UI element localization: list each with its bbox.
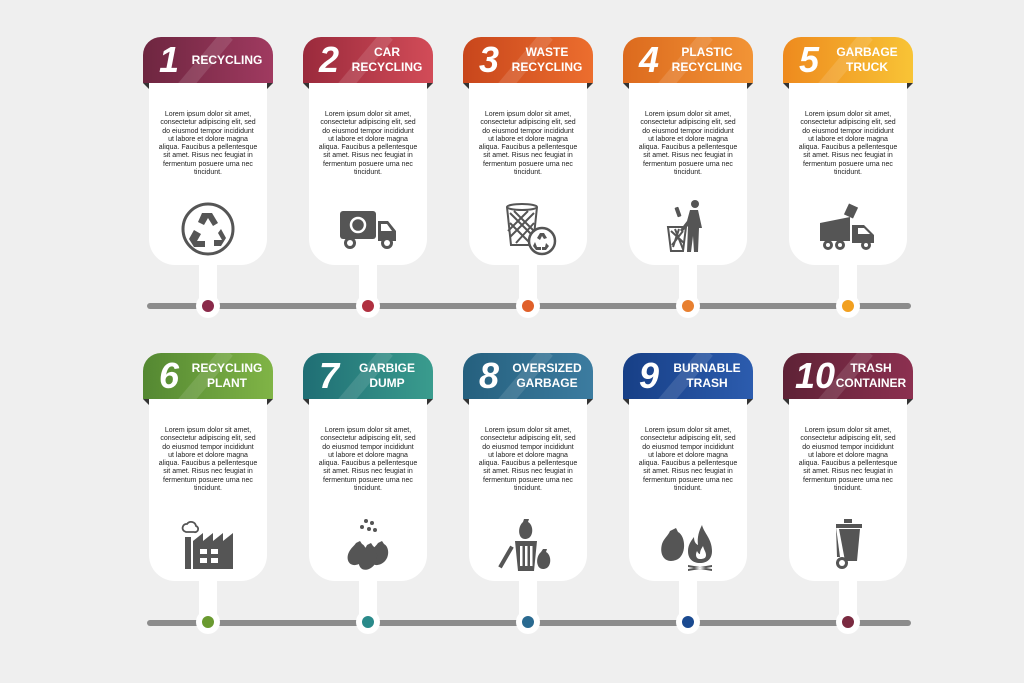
text 3: consectetur adipiscing elit, sed: [480, 119, 576, 126]
text 9: do eiusmod tempor incididunt: [642, 444, 734, 451]
card 1: [143, 37, 273, 318]
text 5: sit amet. Risus nec feugiat in: [803, 152, 893, 159]
text 6: do eiusmod tempor incididunt: [162, 444, 254, 451]
header 8: OVERSIZED: [512, 361, 582, 375]
card 8: [463, 353, 593, 634]
icon: recycle: [182, 202, 234, 256]
icon: person throwing bottle: [666, 200, 702, 252]
text 6: fermentum posuere urna nec: [163, 477, 253, 484]
dot 9: [682, 616, 694, 628]
header 5: 5: [799, 39, 819, 80]
timeline row 2: [147, 620, 911, 626]
text 8: Lorem ipsum dolor sit amet,: [485, 427, 571, 434]
text 3: [479, 110, 577, 176]
text 7: Lorem ipsum dolor sit amet,: [325, 427, 411, 434]
header 7: [303, 353, 433, 399]
text 8: aliqua. Faucibus a pellentesque: [479, 460, 577, 467]
header 7: DUMP: [369, 376, 405, 390]
text 3: do eiusmod tempor incididunt: [482, 128, 574, 135]
text 4: fermentum posuere urna nec: [643, 161, 733, 168]
header 10: [783, 353, 913, 399]
text 10: [799, 426, 897, 492]
text 2: ut labore et dolore magna: [328, 136, 408, 143]
text 2: [319, 110, 417, 176]
card 4: [623, 37, 753, 318]
text 10: ut labore et dolore magna: [808, 452, 888, 459]
text 1: sit amet. Risus nec feugiat in: [163, 152, 253, 159]
text 4: Lorem ipsum dolor sit amet,: [645, 111, 731, 118]
dot 10: [842, 616, 854, 628]
header 2: CAR: [374, 45, 400, 59]
text 4: ut labore et dolore magna: [648, 136, 728, 143]
header 8: GARBAGE: [516, 376, 578, 390]
dot 6: [202, 616, 214, 628]
text 3: sit amet. Risus nec feugiat in: [483, 152, 573, 159]
text 9: Lorem ipsum dolor sit amet,: [645, 427, 731, 434]
dot 8: [522, 616, 534, 628]
header 1: 1: [159, 39, 179, 80]
text 9: aliqua. Faucibus a pellentesque: [639, 460, 737, 467]
header 3: RECYCLING: [512, 60, 582, 74]
text 6: consectetur adipiscing elit, sed: [160, 435, 256, 442]
text 1: do eiusmod tempor incididunt: [162, 128, 254, 135]
text 1: aliqua. Faucibus a pellentesque: [159, 144, 257, 151]
text 7: consectetur adipiscing elit, sed: [320, 435, 416, 442]
header 10: 10: [795, 355, 835, 396]
text 3: aliqua. Faucibus a pellentesque: [479, 144, 577, 151]
header 4: PLASTIC: [681, 45, 733, 59]
header 4: [623, 37, 753, 83]
text 7: ut labore et dolore magna: [328, 452, 408, 459]
header 4: 4: [639, 39, 659, 80]
text 6: ut labore et dolore magna: [168, 452, 248, 459]
text 5: consectetur adipiscing elit, sed: [800, 119, 896, 126]
card 6: [143, 353, 273, 634]
text 5: [799, 110, 897, 176]
text 8: consectetur adipiscing elit, sed: [480, 435, 576, 442]
icon: garbage bags: [348, 519, 388, 570]
text 10: consectetur adipiscing elit, sed: [800, 435, 896, 442]
text 5: fermentum posuere urna nec: [803, 161, 893, 168]
dot 7: [362, 616, 374, 628]
text 6: sit amet. Risus nec feugiat in: [163, 468, 253, 475]
text 7: do eiusmod tempor incididunt: [322, 444, 414, 451]
text 9: sit amet. Risus nec feugiat in: [643, 468, 733, 475]
text 2: fermentum posuere urna nec: [323, 161, 413, 168]
text 4: tincidunt.: [674, 169, 702, 176]
text 6: tincidunt.: [194, 485, 222, 492]
header 6: [143, 353, 273, 399]
text 4: aliqua. Faucibus a pellentesque: [639, 144, 737, 151]
timeline row 1: [147, 303, 911, 309]
text 10: aliqua. Faucibus a pellentesque: [799, 460, 897, 467]
text 3: Lorem ipsum dolor sit amet,: [485, 111, 571, 118]
card 5: [783, 37, 913, 318]
text 1: Lorem ipsum dolor sit amet,: [165, 111, 251, 118]
header 9: BURNABLE: [673, 361, 741, 375]
header 7: GARBIGE: [359, 361, 415, 375]
text 4: sit amet. Risus nec feugiat in: [643, 152, 733, 159]
text 7: [319, 426, 417, 492]
text 2: do eiusmod tempor incididunt: [322, 128, 414, 135]
icon: factory: [182, 521, 233, 569]
header 2: 2: [319, 39, 339, 80]
card 3: [463, 37, 593, 318]
header 10: TRASH: [850, 361, 892, 375]
text 2: tincidunt.: [354, 169, 382, 176]
text 1: fermentum posuere urna nec: [163, 161, 253, 168]
header 8: 8: [479, 355, 499, 396]
text 10: sit amet. Risus nec feugiat in: [803, 468, 893, 475]
text 3: fermentum posuere urna nec: [483, 161, 573, 168]
icon: wastebasket with recycle: [506, 203, 556, 256]
text 3: ut labore et dolore magna: [488, 136, 568, 143]
text 2: aliqua. Faucibus a pellentesque: [319, 144, 417, 151]
text 10: tincidunt.: [834, 485, 862, 492]
header 1: [143, 37, 273, 83]
text 3: tincidunt.: [514, 169, 542, 176]
dot 4: [682, 300, 694, 312]
text 6: aliqua. Faucibus a pellentesque: [159, 460, 257, 467]
header 5: [783, 37, 913, 83]
header 3: 3: [479, 39, 499, 80]
text 6: [159, 426, 257, 492]
text 8: tincidunt.: [514, 485, 542, 492]
icon: wheelie bin: [836, 519, 862, 569]
text 8: ut labore et dolore magna: [488, 452, 568, 459]
text 1: consectetur adipiscing elit, sed: [160, 119, 256, 126]
text 7: sit amet. Risus nec feugiat in: [323, 468, 413, 475]
text 5: aliqua. Faucibus a pellentesque: [799, 144, 897, 151]
dot 3: [522, 300, 534, 312]
text 9: fermentum posuere urna nec: [643, 477, 733, 484]
card 9: [623, 353, 753, 634]
text 5: Lorem ipsum dolor sit amet,: [805, 111, 891, 118]
card 2: [303, 37, 433, 318]
text 10: Lorem ipsum dolor sit amet,: [805, 427, 891, 434]
icon: garbage truck: [820, 204, 874, 250]
header 5: GARBAGE: [836, 45, 898, 59]
text 7: aliqua. Faucibus a pellentesque: [319, 460, 417, 467]
text 10: do eiusmod tempor incididunt: [802, 444, 894, 451]
card 10: [783, 353, 913, 634]
text 7: fermentum posuere urna nec: [323, 477, 413, 484]
header 6: 6: [159, 355, 179, 396]
header 10: CONTAINER: [836, 376, 906, 390]
text 6: Lorem ipsum dolor sit amet,: [165, 427, 251, 434]
text 4: [639, 110, 737, 176]
text 2: sit amet. Risus nec feugiat in: [323, 152, 413, 159]
text 1: [159, 110, 257, 176]
header 4: RECYCLING: [672, 60, 742, 74]
header 1: RECYCLING: [192, 52, 262, 66]
text 9: ut labore et dolore magna: [648, 452, 728, 459]
text 8: do eiusmod tempor incididunt: [482, 444, 574, 451]
text 1: tincidunt.: [194, 169, 222, 176]
text 10: fermentum posuere urna nec: [803, 477, 893, 484]
header 9: [623, 353, 753, 399]
card 7: [303, 353, 433, 634]
text 4: do eiusmod tempor incididunt: [642, 128, 734, 135]
text 2: Lorem ipsum dolor sit amet,: [325, 111, 411, 118]
text 5: do eiusmod tempor incididunt: [802, 128, 894, 135]
header 8: [463, 353, 593, 399]
icon: bin with bags: [498, 519, 550, 571]
dot 5: [842, 300, 854, 312]
icon: truck: [340, 211, 396, 249]
header 2: [303, 37, 433, 83]
dot 2: [362, 300, 374, 312]
text 5: tincidunt.: [834, 169, 862, 176]
text 1: ut labore et dolore magna: [168, 136, 248, 143]
text 8: fermentum posuere urna nec: [483, 477, 573, 484]
text 4: consectetur adipiscing elit, sed: [640, 119, 736, 126]
text 8: sit amet. Risus nec feugiat in: [483, 468, 573, 475]
header 3: [463, 37, 593, 83]
dot 1: [202, 300, 214, 312]
text 7: tincidunt.: [354, 485, 382, 492]
header 6: RECYCLING: [192, 361, 262, 375]
header 9: 9: [639, 355, 659, 396]
text 8: [479, 426, 577, 492]
text 9: [639, 426, 737, 492]
text 9: consectetur adipiscing elit, sed: [640, 435, 736, 442]
header 6: PLANT: [207, 376, 247, 390]
header 7: 7: [319, 355, 339, 396]
header 3: WASTE: [526, 45, 568, 59]
header 5: TRUCK: [846, 60, 888, 74]
text 2: consectetur adipiscing elit, sed: [320, 119, 416, 126]
icon: bag and fire: [661, 525, 712, 571]
header 9: TRASH: [686, 376, 728, 390]
header 2: RECYCLING: [352, 60, 422, 74]
text 9: tincidunt.: [674, 485, 702, 492]
text 5: ut labore et dolore magna: [808, 136, 888, 143]
